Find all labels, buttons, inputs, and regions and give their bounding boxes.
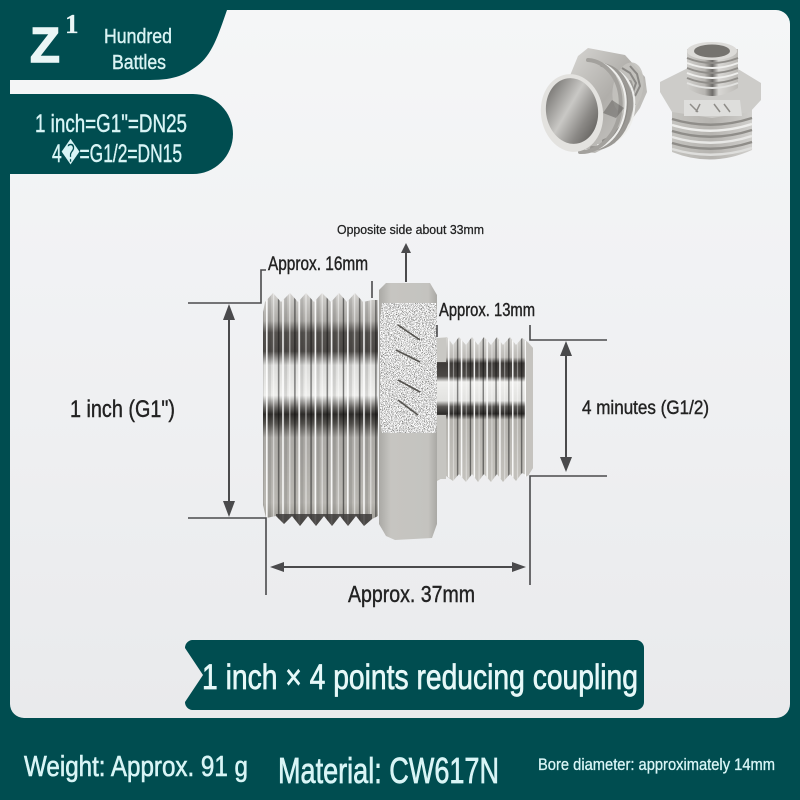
title banner: [185, 640, 644, 710]
arrow: total length: [270, 562, 526, 572]
brand logo: [30, 9, 78, 73]
large thread: [263, 293, 378, 526]
icon: small photo, upright fitting: [660, 42, 761, 160]
dimension labels: Approx. 37mm: [348, 581, 475, 607]
banner text: 1 inch × 4 points reducing coupling: [202, 658, 638, 697]
equivalence text: 4�=G1/2=DN15: [52, 139, 182, 168]
dimension labels: [70, 222, 709, 607]
equivalence text: 1 inch=G1"=DN25: [35, 110, 187, 138]
arrow: 1 inch height: [223, 304, 235, 517]
equivalence text: [35, 110, 187, 168]
dimension lines: [188, 270, 607, 595]
panel: brand tab: [0, 0, 232, 80]
brand name: [104, 26, 172, 74]
spec: material: Material: CW617N: [278, 750, 499, 791]
brand name: Hundred: [104, 26, 172, 48]
brand logo: Z: [30, 19, 60, 73]
hex collar: [379, 283, 437, 540]
arrow: across flats: [401, 243, 411, 282]
panel: size equivalence: [0, 94, 233, 174]
arrow: 4 minutes height: [560, 341, 572, 472]
brand logo: 1: [65, 9, 78, 39]
spec: weight: Weight: Approx. 91 g: [24, 751, 248, 783]
small thread: [437, 337, 533, 482]
dimension labels: Opposite side about 33mm: [337, 222, 484, 237]
main fitting: [263, 283, 533, 540]
dimension labels: Approx. 16mm: [268, 254, 368, 275]
dimension labels: Approx. 13mm: [439, 300, 535, 320]
dimension labels: 4 minutes (G1/2): [582, 398, 709, 419]
icon: small photo, angled fitting: [536, 48, 648, 156]
dimension labels: 1 inch (G1"): [70, 396, 175, 423]
brand name: Battles: [112, 52, 166, 74]
